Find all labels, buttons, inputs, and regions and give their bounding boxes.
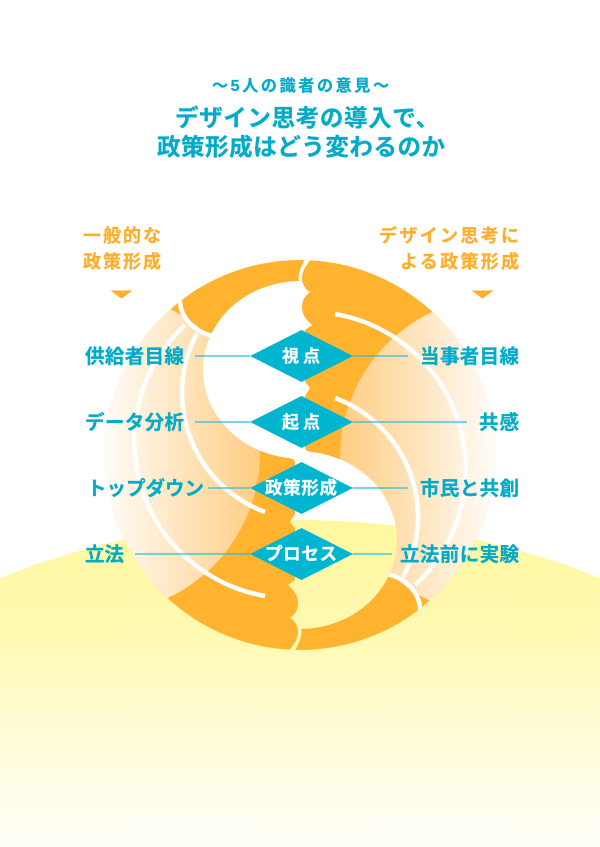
leader lines (135, 356, 467, 554)
right labels: 当事者目線 (420, 346, 519, 368)
bottom-right ring cap (372, 572, 422, 636)
heading: design thinking policy making: デザイン思考に (379, 225, 519, 246)
left labels: 立法 (85, 544, 124, 566)
subtitle: ～5人の識者の意見～ (212, 77, 389, 95)
right labels: 立法前に実験 (400, 544, 519, 566)
right labels (400, 346, 519, 566)
arrow: left heading (112, 291, 131, 298)
diamond: process: プロセス (265, 544, 337, 564)
diamond: process (250, 528, 353, 580)
diamond: starting point (250, 396, 353, 448)
orange base disc (105, 260, 495, 650)
diamond: viewpoint (250, 330, 353, 382)
left labels: 供給者目線 (85, 346, 184, 368)
heading: design thinking policy making (379, 225, 519, 272)
heading: conventional policy making: 一般的な (83, 226, 161, 246)
right labels: 市民と共創 (420, 478, 519, 500)
diamond: viewpoint: 視点 (282, 347, 320, 366)
white arcs (134, 314, 466, 596)
title: デザイン思考の導入で、 (175, 104, 439, 131)
right gradient band (340, 312, 495, 600)
arrow: right heading (473, 291, 492, 298)
diamond: policy making: 政策形成 (265, 478, 337, 498)
heading: conventional policy making (83, 226, 161, 272)
diamond: policy making (250, 462, 353, 514)
left gradient band (105, 309, 260, 598)
heading: conventional policy making: 政策形成 (83, 251, 161, 272)
right labels: 共感 (479, 411, 519, 434)
left labels: トップダウン (87, 477, 204, 500)
left labels (85, 346, 204, 566)
left labels: データ分析 (85, 411, 184, 434)
title: 政策形成はどう変わるのか (157, 134, 446, 160)
yellow dome background (0, 520, 600, 847)
diamond: starting point: 起点 (282, 413, 320, 432)
heading: design thinking policy making: よる政策形成 (400, 251, 519, 272)
title (157, 104, 446, 160)
S-shaped circle diagram (105, 260, 495, 650)
top-left ring cap (178, 274, 228, 338)
